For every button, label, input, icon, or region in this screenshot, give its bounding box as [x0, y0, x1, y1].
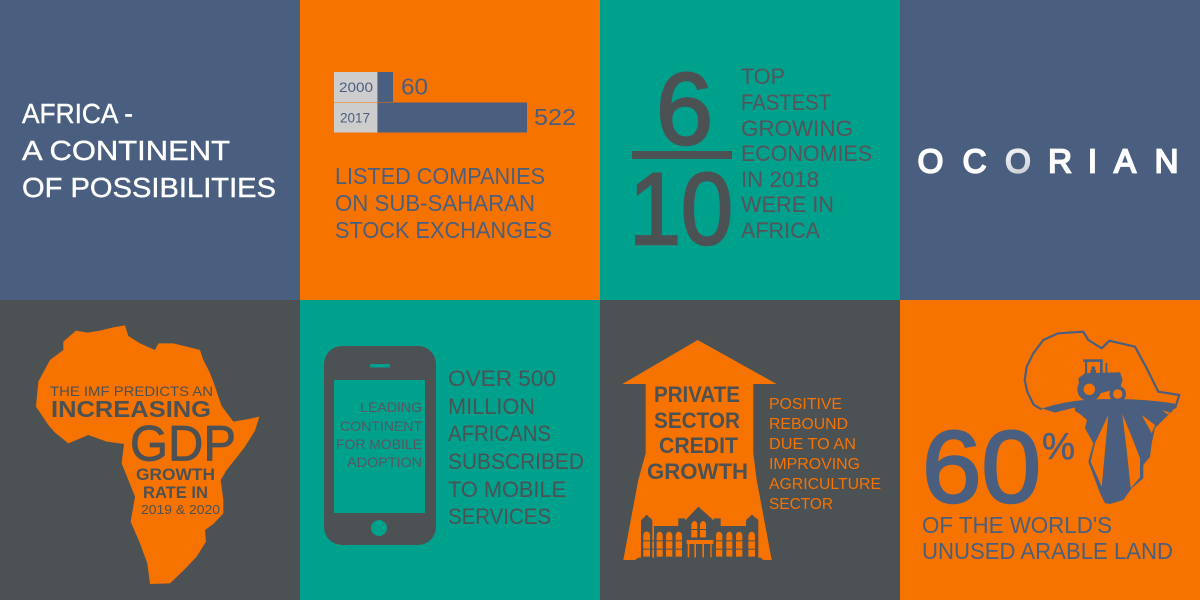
panel: title — [0, 0, 300, 300]
text: leading continent for mobile adoption: LEADING — [360, 399, 422, 415]
bar chart: listed companies 2000 vs 2017: 522 — [534, 104, 576, 130]
text: the IMF predicts an increasing GDP growth rate in 2019 and 2020: GROWTH — [136, 465, 215, 484]
icon: bank building — [635, 507, 763, 560]
panel: listed companies — [300, 0, 600, 300]
fraction: 6 out of 10 — [629, 52, 733, 266]
text: positive rebound due to an improving agriculture sector: AGRICULTURE — [769, 476, 881, 493]
text: private sector credit growth: CREDIT — [659, 433, 739, 458]
stat: 60 percent: % — [1042, 426, 1075, 468]
text: top fastest growing economies in 2018 were in Africa: WERE IN — [741, 192, 834, 217]
text: positive rebound due to an improving agriculture sector — [769, 396, 881, 513]
panel: mobile adoption — [300, 300, 600, 600]
text: over 500 million Africans subscribed to mobile services: TO MOBILE — [448, 477, 566, 502]
text: top fastest growing economies in 2018 were in Africa: ECONOMIES — [741, 141, 872, 166]
bar chart: listed companies 2000 vs 2017: 60 — [401, 74, 428, 100]
text: the IMF predicts an increasing GDP growth rate in 2019 and 2020: INCREASING — [51, 396, 211, 422]
icon: Africa outline with road and tractor — [1025, 332, 1179, 504]
panel: private sector credit — [600, 300, 900, 600]
text: the IMF predicts an increasing GDP growth rate in 2019 and 2020 — [50, 383, 236, 517]
text: over 500 million Africans subscribed to mobile services: SUBSCRIBED — [448, 449, 584, 474]
text: positive rebound due to an improving agriculture sector: DUE TO AN — [769, 436, 856, 453]
text: top fastest growing economies in 2018 were in Africa: AFRICA — [741, 218, 820, 243]
text: top fastest growing economies in 2018 were in Africa: GROWING — [741, 116, 853, 141]
text: of the world's unused arable land — [922, 512, 1173, 564]
heading: Africa - a continent of possibilities: OF POSSIBILITIES — [22, 172, 276, 203]
icon: smartphone — [324, 346, 436, 545]
text: over 500 million Africans subscribed to mobile services: OVER 500 — [448, 366, 556, 391]
text: leading continent for mobile adoption: CONTINENT — [340, 418, 422, 434]
text: over 500 million Africans subscribed to mobile services — [448, 366, 584, 529]
heading: Africa - a continent of possibilities — [22, 98, 276, 203]
text: leading continent for mobile adoption — [336, 399, 422, 470]
text: positive rebound due to an improving agriculture sector: IMPROVING — [769, 456, 860, 473]
panel: arable land — [900, 300, 1200, 600]
text: private sector credit growth: GROWTH — [647, 459, 748, 484]
heading: Africa - a continent of possibilities: AFRICA - — [22, 98, 133, 129]
text: the IMF predicts an increasing GDP growth rate in 2019 and 2020: 2019 & 2020 — [141, 502, 220, 517]
text: positive rebound due to an improving agriculture sector: POSITIVE — [769, 396, 842, 413]
text: leading continent for mobile adoption: FOR MOBILE — [336, 436, 422, 452]
text: positive rebound due to an improving agriculture sector: SECTOR — [769, 496, 833, 513]
panel: logo — [900, 0, 1200, 300]
panel: GDP growth — [0, 300, 300, 600]
text: listed companies on sub-saharan stock exchanges: LISTED COMPANIES — [335, 163, 545, 189]
text: private sector credit growth: PRIVATE — [654, 382, 740, 407]
fraction: 6 out of 10: 6 — [656, 52, 713, 166]
text: over 500 million Africans subscribed to mobile services: AFRICANS — [448, 421, 551, 446]
text: over 500 million Africans subscribed to mobile services: SERVICES — [448, 504, 551, 529]
map: Africa silhouette — [36, 325, 259, 584]
text: leading continent for mobile adoption: ADOPTION — [347, 454, 422, 470]
bar chart: listed companies 2000 vs 2017 — [334, 72, 576, 132]
text: top fastest growing economies in 2018 were in Africa: FASTEST — [741, 90, 831, 115]
text: top fastest growing economies in 2018 were in Africa — [741, 64, 872, 243]
text: listed companies on sub-saharan stock exchanges — [335, 163, 552, 243]
stat: 60 percent: 60 — [922, 410, 1041, 524]
text: private sector credit growth — [647, 382, 748, 484]
text: the IMF predicts an increasing GDP growth rate in 2019 and 2020: RATE IN — [143, 483, 208, 502]
fraction: 6 out of 10: 10 — [629, 152, 733, 266]
logo: Ocorian wordmark: OC O RIAN — [918, 142, 1178, 180]
text: top fastest growing economies in 2018 were in Africa: IN 2018 — [741, 167, 819, 192]
text: top fastest growing economies in 2018 were in Africa: TOP — [741, 64, 785, 89]
heading: Africa - a continent of possibilities: A CONTINENT — [22, 135, 230, 166]
panel: fastest growing economies — [600, 0, 900, 300]
text: listed companies on sub-saharan stock exchanges: ON SUB-SAHARAN — [335, 190, 535, 216]
text: positive rebound due to an improving agriculture sector: REBOUND — [769, 416, 848, 433]
bar chart: listed companies 2000 vs 2017: 2017 — [340, 110, 370, 126]
icon: tractor — [1077, 359, 1126, 402]
text: of the world's unused arable land: OF THE WORLD'S — [922, 512, 1112, 538]
text: the IMF predicts an increasing GDP growth rate in 2019 and 2020: GDP — [130, 416, 236, 472]
text: of the world's unused arable land: UNUSED ARABLE LAND — [922, 538, 1173, 564]
bar chart: listed companies 2000 vs 2017: 2000 — [339, 79, 373, 95]
arrow: upward arrow with widening base — [622, 340, 777, 560]
text: over 500 million Africans subscribed to mobile services: MILLION — [448, 394, 535, 419]
text: listed companies on sub-saharan stock exchanges: STOCK EXCHANGES — [335, 217, 552, 243]
text: private sector credit growth: SECTOR — [654, 408, 740, 433]
text: the IMF predicts an increasing GDP growth rate in 2019 and 2020: THE IMF PREDICTS AN — [50, 383, 213, 399]
